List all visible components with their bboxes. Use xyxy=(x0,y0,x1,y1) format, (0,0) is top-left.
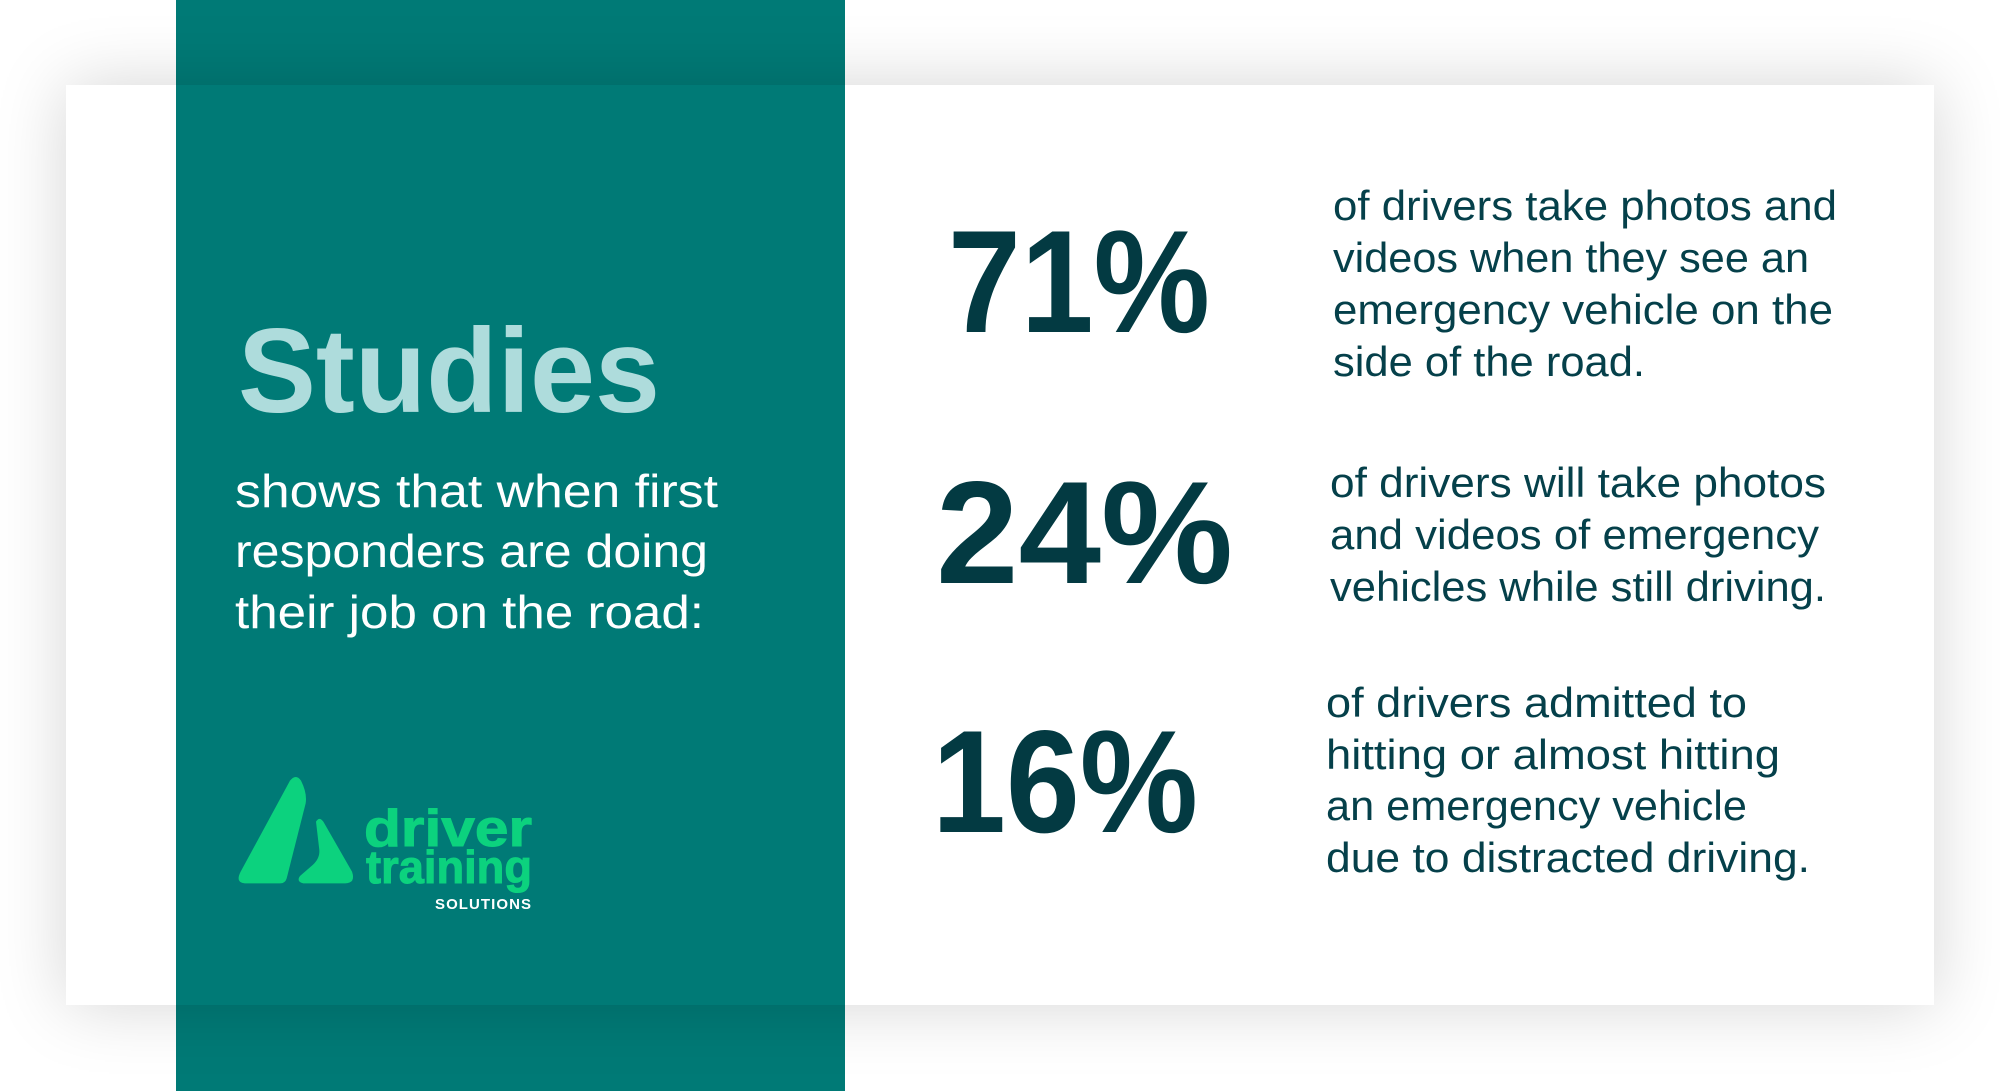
description 24%: and videos of emergency xyxy=(1330,511,1819,558)
number 16%: 16% xyxy=(932,700,1198,863)
intro text: responders are doing xyxy=(235,525,708,577)
stat: 71% xyxy=(948,182,1837,385)
teal vertical panel xyxy=(176,0,845,1091)
icon: logo mark xyxy=(239,777,353,883)
intro text xyxy=(235,465,718,638)
description 16% xyxy=(1326,679,1810,881)
intro text: their job on the road: xyxy=(235,586,704,638)
description 24% xyxy=(1330,459,1826,610)
number 24%: 24% xyxy=(936,451,1233,614)
heading: Studies: Studies xyxy=(238,304,660,438)
logo wordmark: training: training xyxy=(366,841,532,893)
description 71% xyxy=(1333,182,1837,385)
description 24%: of drivers will take photos xyxy=(1330,459,1826,506)
logo wordmark: driver: driver xyxy=(364,800,532,858)
number 71%: 71% xyxy=(948,200,1210,363)
description 16%: hitting or almost hitting xyxy=(1326,731,1780,778)
stat: 16% xyxy=(932,679,1810,881)
stat: 24% xyxy=(936,451,1826,614)
description 71%: emergency vehicle on the xyxy=(1333,286,1833,333)
description 71%: of drivers take photos and xyxy=(1333,182,1837,229)
description 16%: of drivers admitted to xyxy=(1326,679,1747,726)
description 16%: due to distracted driving. xyxy=(1326,834,1810,881)
description 24%: vehicles while still driving. xyxy=(1330,563,1826,610)
description 16%: an emergency vehicle xyxy=(1326,782,1747,829)
logo wordmark: solutions: SOLUTIONS xyxy=(435,896,531,913)
white card xyxy=(66,85,1934,1005)
logo: Driver Training Solutions xyxy=(239,777,532,913)
intro text: shows that when first xyxy=(235,465,718,517)
description 71%: side of the road. xyxy=(1333,338,1645,385)
description 71%: videos when they see an xyxy=(1333,234,1809,281)
card drop shadow xyxy=(66,85,1934,1005)
